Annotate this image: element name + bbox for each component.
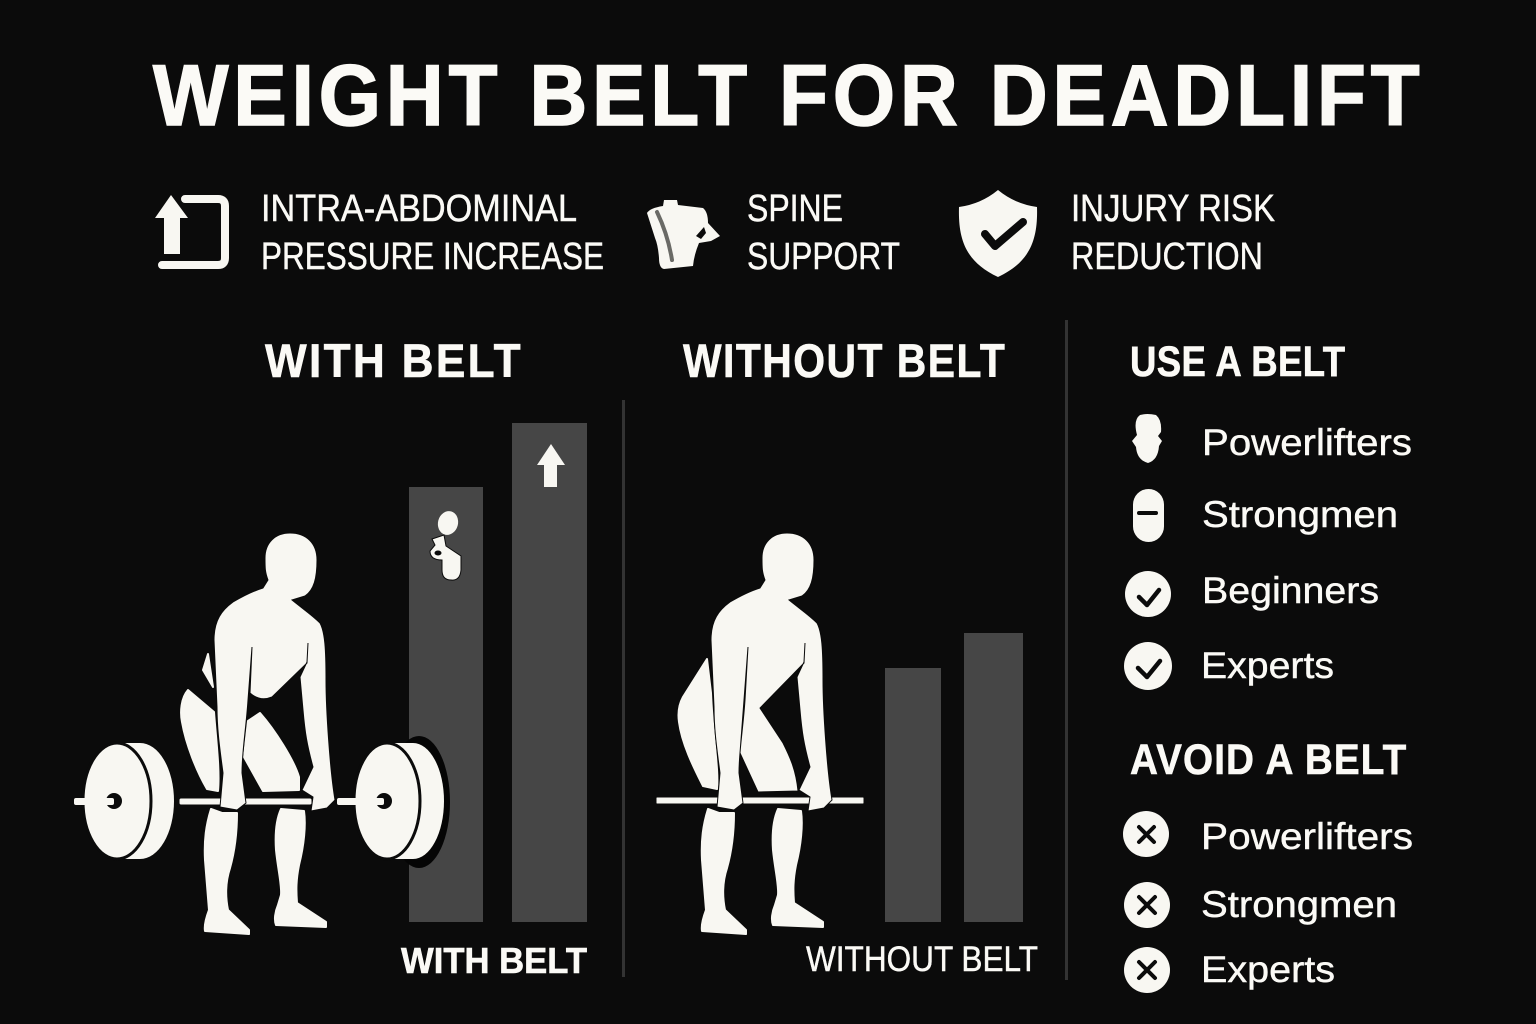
text: intra-abdominal pressure increase: PRESSURE INCREASE <box>261 236 604 278</box>
icon: figure on bar <box>430 509 461 580</box>
icon: pressure arrow <box>155 195 225 265</box>
item: beginners <box>1125 570 1379 617</box>
heading: use a belt: USE A BELT <box>1130 338 1345 386</box>
lifter lower body <box>678 659 823 934</box>
item: powerlifters: Powerlifters <box>1202 422 1412 463</box>
barbell <box>74 743 444 859</box>
divider right <box>1065 320 1068 980</box>
icon: x circle <box>1123 811 1169 857</box>
text: intra-abdominal pressure increase <box>261 188 604 278</box>
icon: check circle <box>1125 571 1171 617</box>
bar chart: with belt <box>409 423 587 922</box>
label: with belt: WITH BELT <box>401 940 587 981</box>
text: spine support: SUPPORT <box>747 236 900 278</box>
item: experts: Experts <box>1201 645 1334 686</box>
item: powerlifters <box>1123 811 1413 857</box>
item: beginners: Beginners <box>1202 570 1379 611</box>
divider left <box>622 400 625 977</box>
item: powerlifters: Powerlifters <box>1201 816 1413 857</box>
icon: spine torso <box>647 200 720 269</box>
figure: lifter with barbell <box>74 533 450 934</box>
benefit: injury risk reduction <box>959 188 1275 278</box>
text: injury risk reduction: INJURY RISK <box>1071 188 1275 230</box>
barbell halo <box>388 736 450 868</box>
icon: shield with check <box>959 190 1037 277</box>
item: experts <box>1124 947 1335 993</box>
label: without belt: WITHOUT BELT <box>806 940 1038 979</box>
figure: lifter without belt <box>656 533 864 934</box>
lifter upper body <box>214 533 335 811</box>
heading: avoid a belt: AVOID A BELT <box>1130 735 1406 783</box>
benefit: spine support <box>647 188 900 278</box>
text: injury risk reduction: REDUCTION <box>1071 236 1263 278</box>
text: intra-abdominal pressure increase: INTRA-ABDOMINAL <box>261 188 577 230</box>
item: experts: Experts <box>1201 949 1335 990</box>
icon: check circle <box>1124 642 1172 690</box>
icon: up arrow on bar <box>537 444 565 487</box>
item: strongmen <box>1133 489 1398 542</box>
benefit: intra-abdominal pressure <box>155 188 604 278</box>
panel: avoid a belt <box>1123 735 1413 993</box>
item: strongmen: Strongmen <box>1202 494 1398 535</box>
panel: use a belt <box>1124 338 1412 690</box>
icon: x circle <box>1124 947 1170 993</box>
lifter upper body <box>711 533 832 811</box>
text: spine support <box>747 188 900 278</box>
text: injury risk reduction <box>1071 188 1275 278</box>
text: spine support: SPINE <box>747 188 843 230</box>
title: WEIGHT BELT FOR DEADLIFT <box>153 47 1420 144</box>
icon: oval with dash <box>1133 489 1164 542</box>
icon: vertebra <box>1132 414 1162 463</box>
barbell <box>656 797 864 804</box>
item: powerlifters <box>1132 414 1412 463</box>
icon: x circle <box>1124 882 1170 928</box>
item: strongmen <box>1124 882 1397 928</box>
item: strongmen: Strongmen <box>1201 884 1397 925</box>
item: experts <box>1124 642 1334 690</box>
benefits row <box>155 188 1275 278</box>
panel: without belt <box>656 335 1038 979</box>
heading: without belt: WITHOUT BELT <box>683 335 1005 388</box>
bar chart: without belt <box>885 633 1023 922</box>
heading: with belt: WITH BELT <box>265 335 521 387</box>
lifter lower body <box>181 654 326 934</box>
panel: with belt <box>74 335 587 981</box>
